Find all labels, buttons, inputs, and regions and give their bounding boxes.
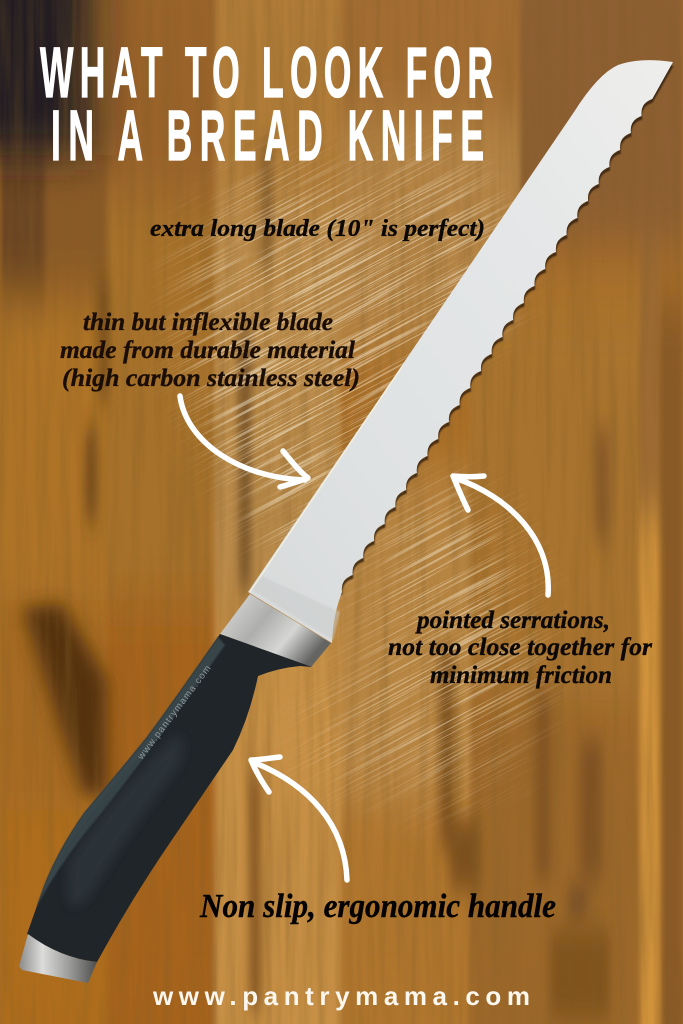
serrated blade bbox=[248, 60, 673, 643]
title: IN A BREAD KNIFE bbox=[51, 95, 484, 175]
callout: blade material: made from durable material bbox=[60, 337, 355, 364]
title bbox=[40, 32, 493, 175]
website footer: www.pantrymama.com bbox=[152, 981, 530, 1011]
arrow: to serrations bbox=[453, 476, 548, 595]
collar bbox=[220, 594, 331, 667]
callout: handle: Non slip, ergonomic handle bbox=[199, 888, 556, 925]
callout: blade length: extra long blade (10" is perfect) bbox=[150, 216, 485, 242]
callout: serrations bbox=[388, 607, 652, 689]
callout: serrations: not too close together for bbox=[388, 634, 652, 661]
handle bbox=[27, 634, 312, 962]
callout: blade material bbox=[60, 309, 360, 392]
knife scratches bbox=[154, 140, 564, 820]
arrow: to blade bbox=[180, 396, 308, 487]
title: WHAT TO LOOK FOR bbox=[40, 32, 493, 112]
callout: blade material: (high carbon stainless steel) bbox=[62, 365, 360, 392]
callout: blade material: thin but inflexible blade bbox=[83, 309, 333, 336]
arrow: to handle bbox=[251, 757, 347, 880]
callout: serrations: pointed serrations, bbox=[415, 607, 610, 634]
handle branding text: www.pantrymama.com bbox=[135, 663, 214, 763]
end cap bbox=[19, 934, 97, 983]
callout: serrations: minimum friction bbox=[430, 662, 612, 689]
